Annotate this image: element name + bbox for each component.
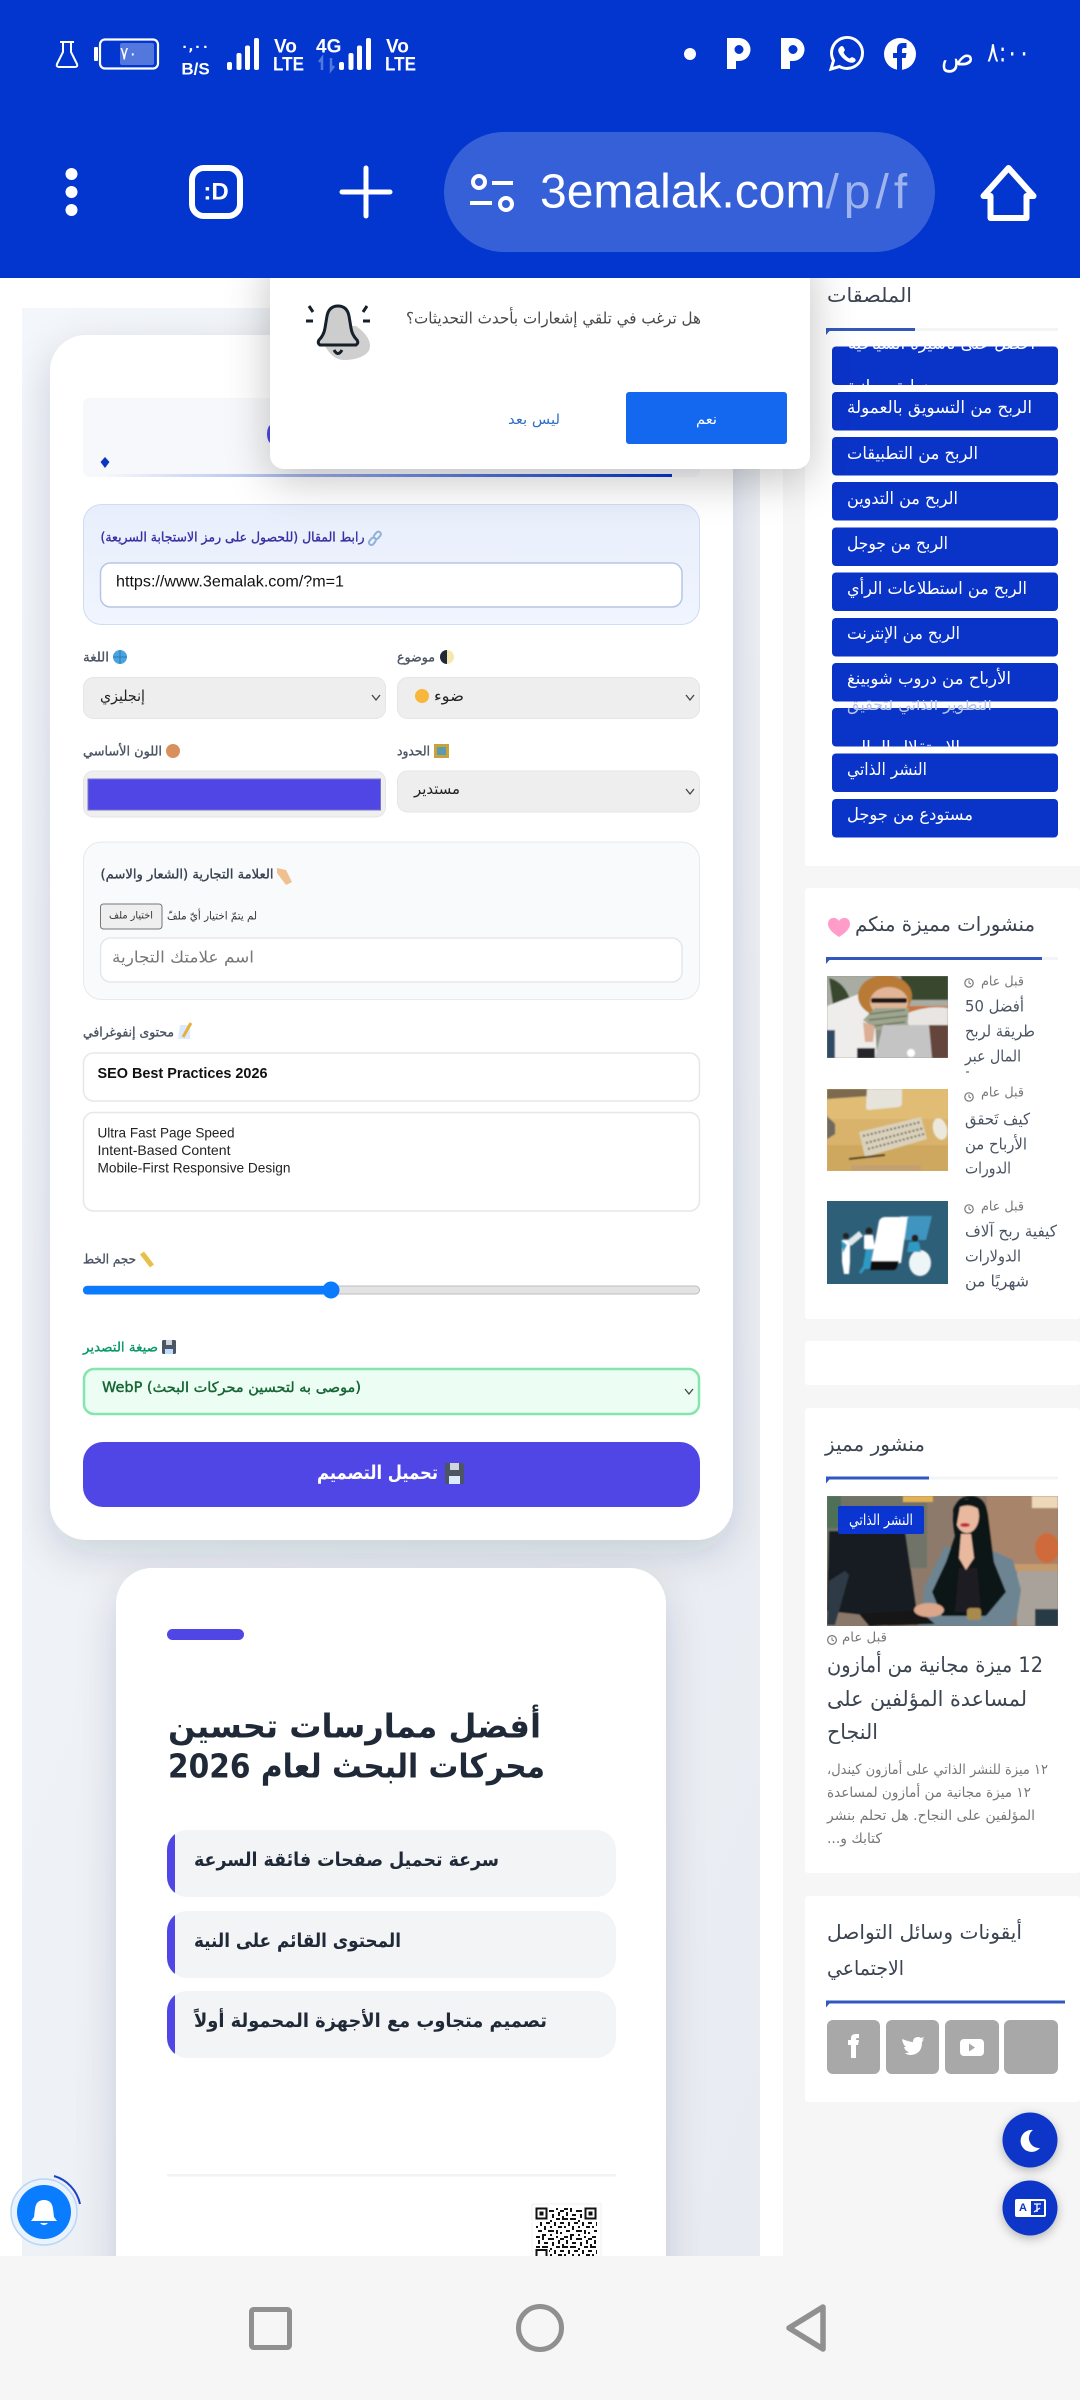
icon: recent apps xyxy=(252,2310,290,2348)
status: network speed xyxy=(181,40,210,78)
dialog message: هل ترغب في تلقي إشعارات بأحدث التحديثات؟ xyxy=(406,306,701,328)
list item: page speed xyxy=(167,1830,616,1897)
tag list: التطوير الذاتي لتحقيق xyxy=(847,695,992,715)
panel: infographic preview card xyxy=(116,1568,666,2328)
status: flask xyxy=(57,42,77,67)
panel: empty widget xyxy=(805,1341,1080,1385)
panel: infographic generator form xyxy=(50,335,733,1540)
post meta: post 1: قبل عام xyxy=(981,974,1024,990)
label: theme xyxy=(397,650,454,666)
post title: post 3: كيفية ربح آلاف xyxy=(965,1222,1057,1242)
heading: social icons: أيقونات وسائل التواصل xyxy=(827,1919,1022,1944)
tag list: الربح من استطلاعات الرأي xyxy=(847,577,1027,599)
status: clock: ٨:٠٠ xyxy=(987,38,1030,68)
status: signal bars 2 xyxy=(339,38,371,70)
heading: social icons xyxy=(827,1919,1022,1981)
label: export format: صيغة التصدير xyxy=(82,1340,158,1356)
form header xyxy=(100,425,672,477)
list item: mobile first: تصميم متجاوب مع الأجهزة المحمولة أولاً xyxy=(194,2008,547,2032)
section: article URL for QR code xyxy=(84,504,700,624)
select: language xyxy=(84,678,386,718)
badge: self publishing: النشر الذاتي xyxy=(849,1511,913,1530)
select: border style xyxy=(398,771,700,812)
select: theme: ضوء xyxy=(434,687,464,705)
section: branding xyxy=(84,842,700,1000)
panel: featured post xyxy=(805,1408,1080,1873)
accent bar xyxy=(167,1629,244,1640)
heading: labels: الملصقات xyxy=(827,283,912,307)
input: colour swatch xyxy=(84,771,386,817)
label: article URL: رابط المقال (للحصول على رمز الاستجابة السريعة) xyxy=(100,530,364,546)
label: borders xyxy=(397,744,449,760)
panel: featured posts from you xyxy=(805,888,1080,1319)
QR code xyxy=(532,2204,602,2256)
icon: blank social xyxy=(1004,2020,1058,2074)
icon: facebook xyxy=(827,2020,880,2074)
icon: back xyxy=(789,2307,823,2349)
label: theme: موضوع xyxy=(397,650,435,666)
icon: home xyxy=(984,168,1034,218)
label: primary colour: اللون الأساسي xyxy=(83,742,162,760)
bottom navigation bar xyxy=(0,2256,1080,2400)
status: 4G xyxy=(316,36,341,70)
post excerpt: featured: المؤلفين على النجاح. هل تحلم بنشر xyxy=(826,1808,1035,1824)
photo: woman at computer xyxy=(827,1496,1058,1626)
photo: woman with money xyxy=(827,976,948,1058)
status: battery: ٧٠ xyxy=(120,44,137,64)
post title: post 3 xyxy=(965,1222,1057,1292)
label: borders: الحدود xyxy=(397,744,430,760)
status: clock: ص xyxy=(941,38,974,74)
list item: intent content: المحتوى القائم على النية xyxy=(194,1930,401,1952)
button: not now: ليس بعد xyxy=(508,412,560,428)
post meta: post 2 xyxy=(965,1086,1024,1101)
panel: social media icons xyxy=(805,1896,1080,2102)
floating button: dark mode xyxy=(1002,2112,1058,2168)
tag list: احصل على تأشيرة السياحية xyxy=(848,331,1035,354)
heading: social icons: الاجتماعي xyxy=(827,1956,904,1981)
status: network speed: B/S xyxy=(181,60,210,78)
post title: post 1: أفضل 50 xyxy=(965,996,1024,1016)
post excerpt: featured xyxy=(826,1760,1048,1847)
status: 4G: 4G xyxy=(316,36,341,58)
tag list: الربح من التسويق بالعمولة xyxy=(847,398,1032,418)
photo: team illustration xyxy=(827,1201,948,1284)
icon: whatsapp xyxy=(831,37,863,69)
floating button: translate: A xyxy=(1019,2202,1027,2214)
input: brand name xyxy=(100,938,682,982)
post meta: post 3: قبل عام xyxy=(981,1200,1024,1214)
heading underline xyxy=(826,1476,1058,1484)
panel: labels sidebar xyxy=(805,278,1080,866)
select: export format: WebP (موصى به لتحسين محركات البحث) xyxy=(102,1380,361,1396)
dialog: notification permission xyxy=(270,250,810,469)
icon: tab counter xyxy=(192,168,240,216)
icon: p app 1 xyxy=(727,38,750,69)
select: language: إنجليزي xyxy=(100,687,145,706)
heading underline xyxy=(826,957,1058,964)
icon: heart xyxy=(828,918,850,937)
button: download design xyxy=(83,1442,700,1507)
post excerpt: featured: كتابك و... xyxy=(827,1831,882,1847)
button: download design: تحميل التصميم xyxy=(317,1462,438,1484)
tag list: الاستقلال المالي xyxy=(847,738,960,758)
select: theme xyxy=(398,678,700,718)
textarea: points: Ultra Fast Page Speed xyxy=(98,1124,234,1140)
post meta: post 2: قبل عام xyxy=(981,1086,1024,1100)
status: VoLTE 1: Vo xyxy=(274,36,297,58)
post title: post 2: الدورات xyxy=(965,1158,1011,1178)
post title: featured: النجاح xyxy=(827,1720,878,1744)
photo: keyboard on desk xyxy=(827,1089,948,1171)
status: signal bars 1 xyxy=(227,38,259,70)
textarea: points xyxy=(84,1112,700,1211)
tag list: الأرباح من دروب شوبينغ xyxy=(847,668,1011,689)
sidebar gutter background xyxy=(783,278,1080,2256)
list item: mobile first xyxy=(167,1991,616,2058)
input: title xyxy=(84,1053,700,1101)
status: VoLTE 1: LTE xyxy=(273,54,304,76)
icon: youtube xyxy=(945,2020,999,2074)
label: infographic content: محتوى إنفوغرافي xyxy=(83,1026,174,1040)
input: title: SEO Best Practices 2026 xyxy=(98,1065,268,1082)
heading underline xyxy=(826,2000,1065,2008)
post title: featured: لمساعدة المؤلفين على xyxy=(827,1687,1027,1711)
post title: post 2 xyxy=(965,1110,1030,1178)
post excerpt: featured: ١٢ ميزة مجانية من أمازون لمساعدة xyxy=(827,1783,1031,1801)
icon: new tab xyxy=(342,168,390,216)
file picker: اختيار ملف xyxy=(109,910,153,922)
icon: p app 2 xyxy=(781,38,804,69)
preview title: محركات البحث لعام 2026 xyxy=(168,1746,545,1786)
post title: post 1: المال عبر xyxy=(964,1046,1021,1066)
post title: featured: 12 ميزة مجانية من أمازون xyxy=(827,1651,1043,1677)
label: language: اللغة xyxy=(83,650,109,666)
post meta: featured: قبل عام xyxy=(842,1630,887,1646)
icon: twitter xyxy=(886,2020,939,2074)
tag list: دولية مجانية xyxy=(847,377,930,397)
input: URL xyxy=(100,563,682,607)
list item: page speed: سرعة تحميل صفحات فائقة السرعة xyxy=(194,1849,499,1871)
label: language xyxy=(84,650,127,664)
post title: post 2: كيف تَحقق xyxy=(965,1110,1030,1130)
select: border style: مستدير xyxy=(413,780,460,798)
textarea: points: Mobile-First Responsive Design xyxy=(98,1160,290,1176)
tag list: النشر الذاتي xyxy=(847,760,927,780)
button: yes: نعم xyxy=(696,412,717,428)
floating notification bell xyxy=(11,2176,80,2245)
button: yes xyxy=(626,392,787,444)
post title: featured xyxy=(827,1651,1043,1744)
icon: tab counter: :D xyxy=(203,178,229,206)
tag list: الربح من التدوين xyxy=(847,489,958,509)
icon: home circle xyxy=(518,2306,562,2350)
floating button: translate xyxy=(1002,2180,1058,2236)
select: export format xyxy=(84,1369,699,1414)
input: URL: https://www.3emalak.com/?m=1 xyxy=(116,574,344,590)
status: clock xyxy=(941,38,1030,74)
heading underline xyxy=(826,328,1058,335)
file picker: لم يتمّ اختيار أيّ ملفّ xyxy=(167,908,257,922)
post title: post 3: الدولارات xyxy=(965,1246,1021,1266)
post title: post 2: الأرباح من xyxy=(965,1134,1027,1154)
icon: more menu xyxy=(66,168,78,216)
tag list: الربح من الإنترنت xyxy=(847,624,960,644)
heading: featured posts: منشورات مميزة منكم xyxy=(855,912,1035,936)
status: dot xyxy=(684,48,696,60)
status: network speed: ٠,٠٠ xyxy=(181,40,209,54)
post title: post 3: شهريًا من xyxy=(965,1272,1029,1292)
tag list: الربح من جوجل xyxy=(847,534,948,554)
icon: facebook app xyxy=(884,38,916,70)
icon: tag xyxy=(277,868,292,885)
input: brand name: اسم علامتك التجارية xyxy=(112,948,254,968)
status: VoLTE 2 xyxy=(385,36,416,76)
slider: font size xyxy=(83,1282,700,1298)
post title: post 1: طريقة لربح xyxy=(965,1022,1035,1042)
status: VoLTE 2: LTE xyxy=(385,54,416,76)
icon: link xyxy=(368,531,382,546)
top app bar xyxy=(0,0,1080,278)
list item: intent content xyxy=(167,1911,616,1978)
address bar xyxy=(444,132,935,252)
badge: self publishing xyxy=(838,1506,924,1534)
status: battery xyxy=(94,40,158,68)
preview title xyxy=(168,1704,545,1786)
status: VoLTE 1 xyxy=(273,36,304,76)
label: branding: العلامة التجارية (الشعار والاسم) xyxy=(100,868,274,882)
url text: 3emalak.com/p/f xyxy=(540,166,912,218)
post title: post 1 xyxy=(964,996,1035,1073)
label: font size: حجم الخط xyxy=(83,1252,136,1268)
post excerpt: featured: ١٢ ميزة للنشر الذاتي على أمازون كيندل، xyxy=(827,1760,1048,1778)
article background panel xyxy=(22,308,760,2256)
icon: bell xyxy=(306,306,370,360)
tag list: مستودع من جوجل xyxy=(847,805,973,825)
tag list: الربح من التطبيقات xyxy=(847,444,978,464)
heading: featured post: منشور مميز xyxy=(824,1432,925,1456)
textarea: points: Intent-Based Content xyxy=(98,1142,231,1158)
preview title: أفضل ممارسات تحسين xyxy=(168,1704,541,1746)
icon: tune xyxy=(470,176,513,210)
tag list xyxy=(832,331,1058,838)
status: VoLTE 2: Vo xyxy=(386,36,409,58)
file picker xyxy=(100,904,257,929)
